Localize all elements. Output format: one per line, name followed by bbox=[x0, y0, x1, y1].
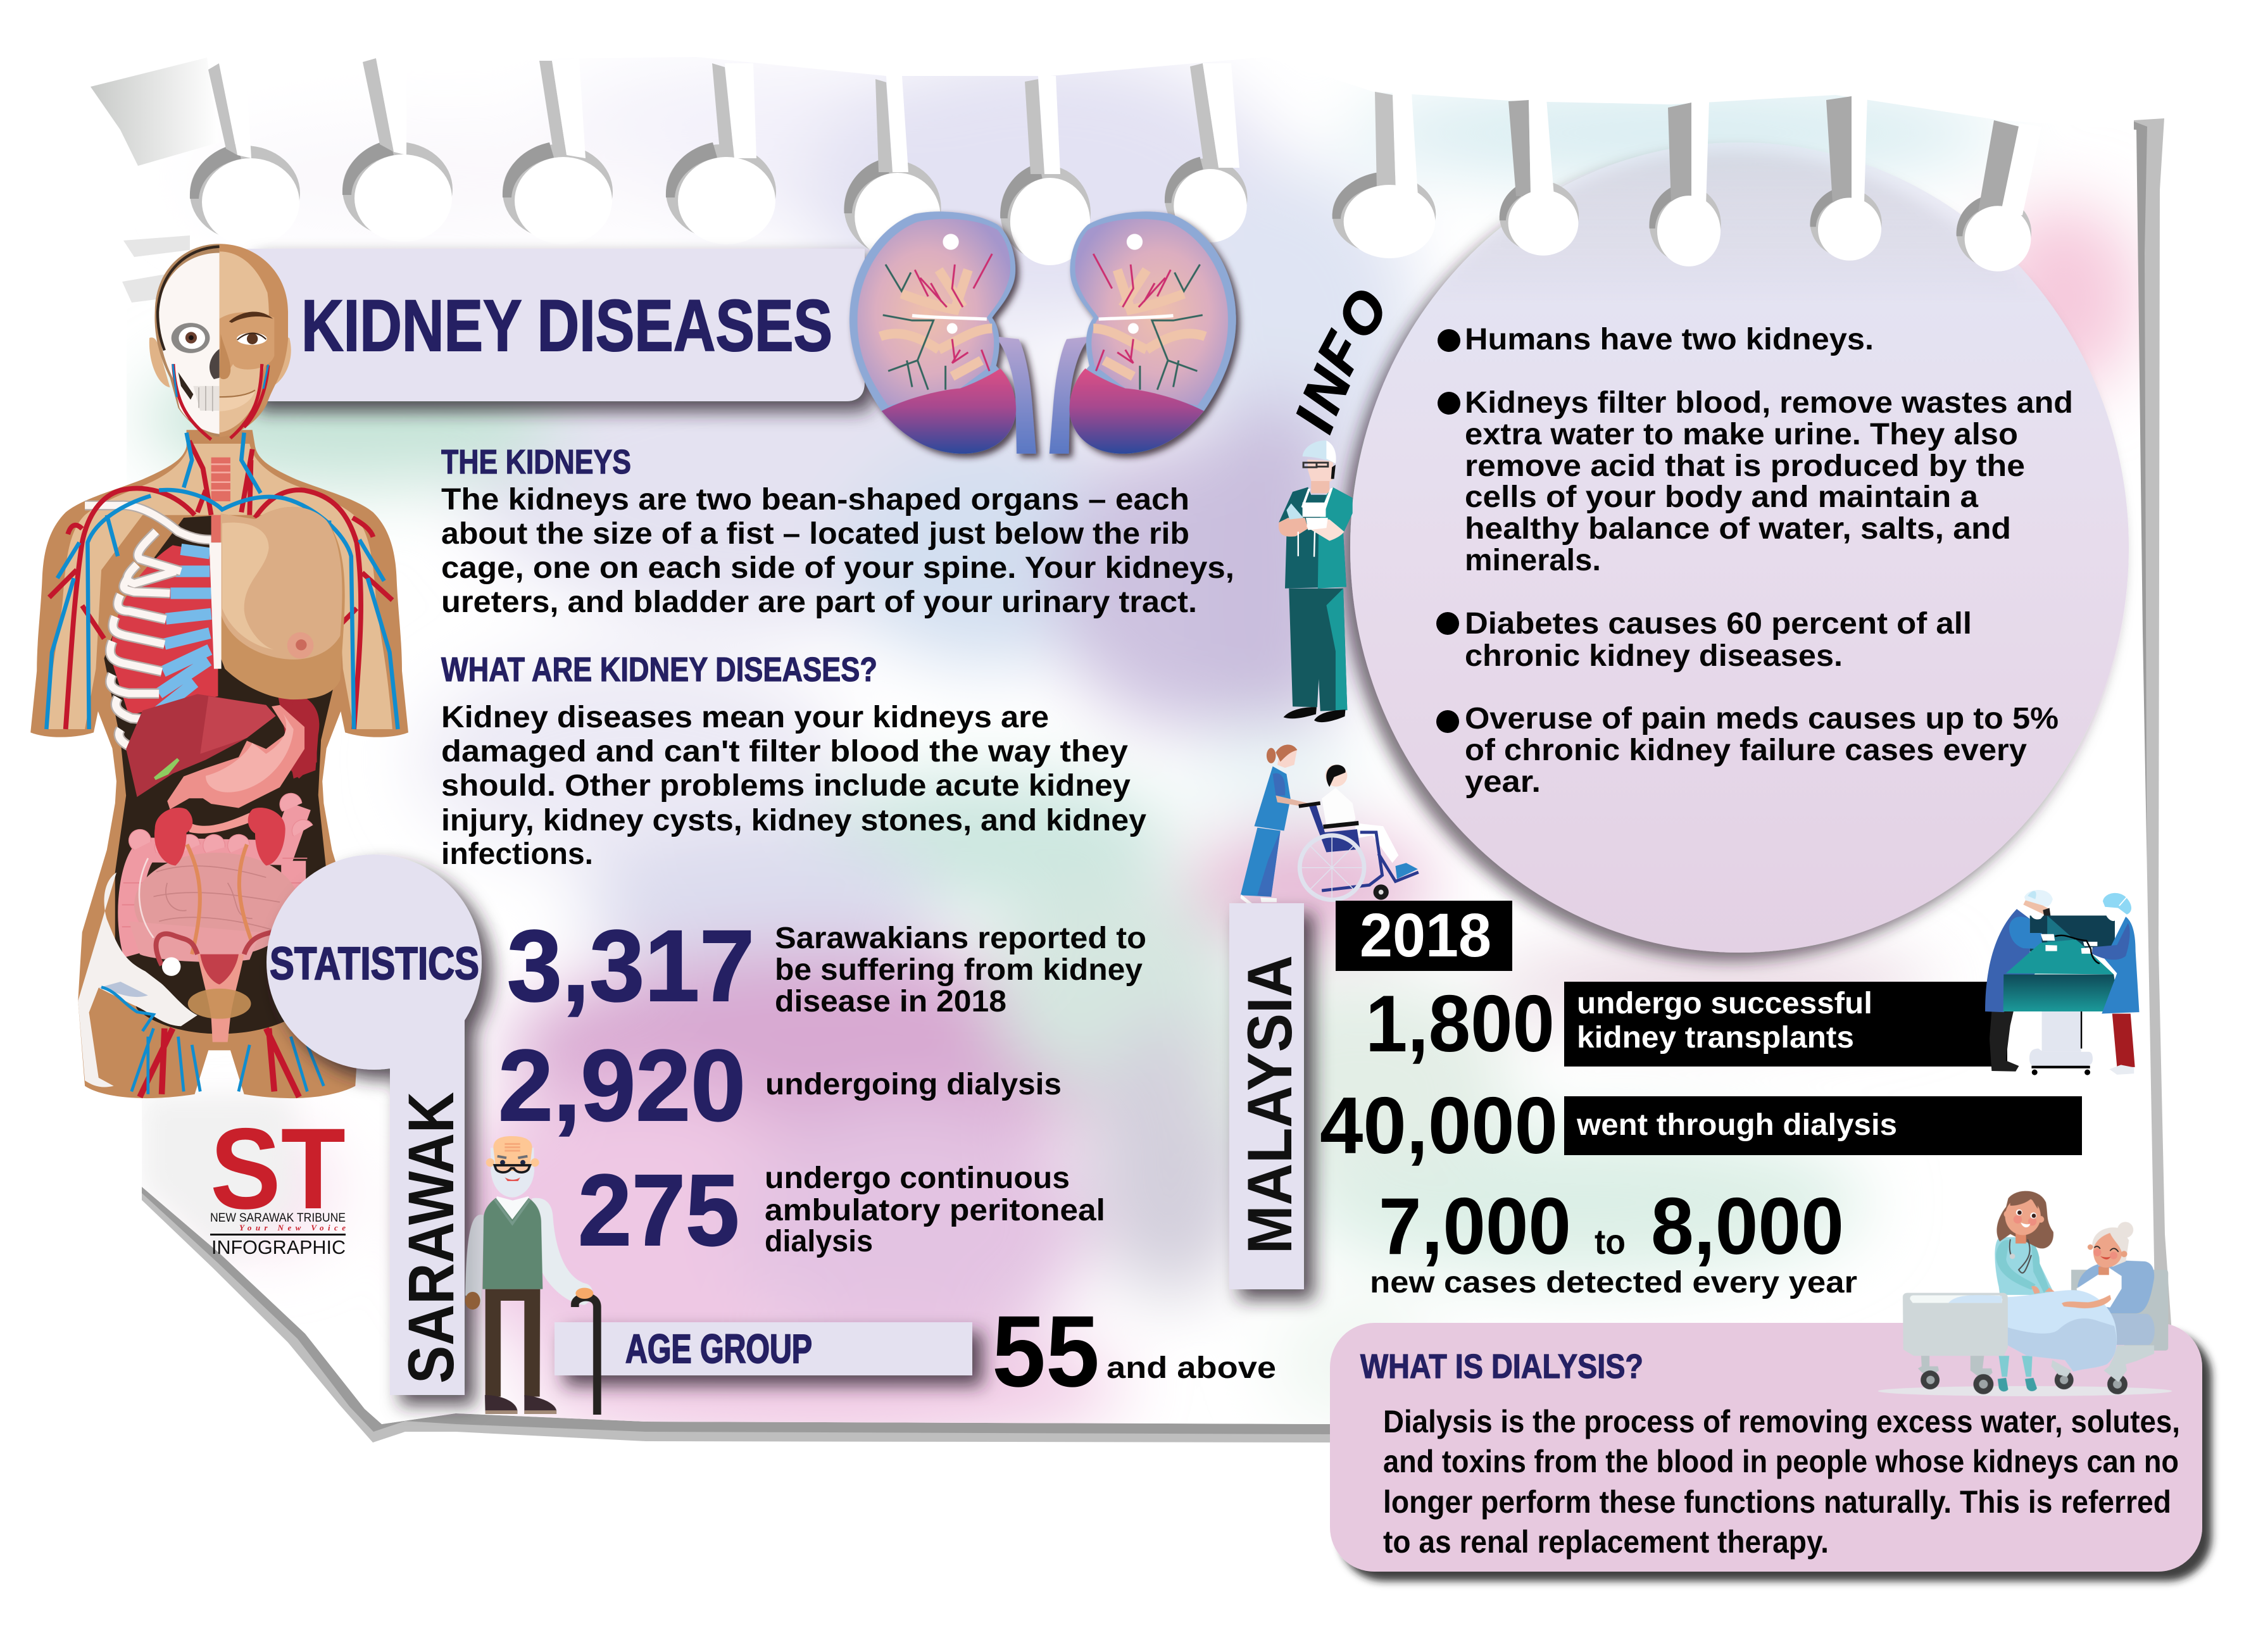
panel: watercolour paper background bbox=[120, 51, 2171, 1443]
bullet: what kidneys do: minerals. bbox=[1465, 544, 1601, 577]
stat: 1,800 transplants bbox=[1365, 979, 2007, 1068]
stat: 40,000 dialysis: 40,000 bbox=[1320, 1080, 1558, 1170]
spine and trachea bbox=[211, 458, 230, 542]
logo: New Sarawak Tribune infographic: Your New Voice bbox=[239, 1223, 346, 1232]
stat: 275 bbox=[578, 1153, 1105, 1267]
stat: 275: undergo continuous bbox=[765, 1161, 1070, 1195]
pelvis bones bbox=[78, 872, 197, 1087]
label: Sarawak: SARAWAK bbox=[395, 1092, 467, 1384]
stat: 1,800 transplants: undergo successful bbox=[1577, 987, 1872, 1020]
text block: the kidneys bbox=[441, 443, 1234, 619]
anatomy figure: human body bbox=[30, 244, 408, 1098]
Malaysia bar: MALAYSIA bbox=[1234, 955, 1305, 1254]
lungs bbox=[111, 545, 218, 715]
stat: age 55 and above bbox=[992, 1294, 1276, 1408]
torso cavity bbox=[104, 515, 343, 1034]
stat: 2,920: undergoing dialysis bbox=[765, 1068, 1062, 1101]
bullet: pain meds: Overuse of pain meds causes up to 5% bbox=[1465, 702, 2059, 735]
heading: curved INFO label: F bbox=[1304, 322, 1376, 383]
text block: the kidneys: ureters, and bladder are part of your urinary tract. bbox=[441, 585, 1197, 619]
stat: 1,800 transplants: 1,800 bbox=[1365, 979, 1555, 1068]
logo: New Sarawak Tribune infographic: ST bbox=[210, 1104, 346, 1233]
heading: statistics: STATISTICS bbox=[270, 939, 479, 989]
stat: 275: ambulatory peritoneal bbox=[765, 1194, 1105, 1227]
logo: New Sarawak Tribune infographic: INFOGRAPHIC bbox=[211, 1236, 346, 1258]
text block: info bullet list bbox=[1436, 323, 2073, 799]
heading: curved INFO label: N bbox=[1289, 358, 1363, 422]
stat: 3,317: disease in 2018 bbox=[775, 985, 1006, 1018]
sternum bbox=[210, 542, 222, 669]
icon: nurse and smiling patient in hospital bed bbox=[1878, 1191, 2172, 1396]
stat: 7,000 to 8,000 new cases: new cases detected every year bbox=[1370, 1266, 1857, 1299]
stat: age 55 and above: 55 bbox=[992, 1294, 1100, 1408]
bullet: what kidneys do: cells of your body and maintain a bbox=[1465, 480, 1978, 514]
icon: surgeons at operating table bbox=[1985, 890, 2140, 1075]
uterus region bbox=[156, 932, 272, 1042]
text block: what are kidney diseases: should. Other problems include acute kidney bbox=[441, 769, 1131, 803]
stat: 40,000 dialysis: went through dialysis bbox=[1576, 1108, 1897, 1142]
panel: info circle bbox=[1350, 142, 2129, 953]
text block: what are kidney diseases: damaged and can't filter blood the way they bbox=[441, 735, 1128, 768]
heading: curved INFO label: O bbox=[1324, 278, 1400, 349]
text block: the kidneys: about the size of a fist – located just below the rib bbox=[441, 517, 1189, 551]
stat: 3,317: be suffering from kidney bbox=[775, 953, 1143, 987]
panel: what is dialysis: Dialysis is the process of removing excess water, solutes, bbox=[1383, 1404, 2180, 1439]
title banner bbox=[247, 249, 865, 401]
organ: kidneys bbox=[154, 808, 192, 866]
bullet: two kidneys: Humans have two kidneys. bbox=[1465, 323, 1874, 356]
stat: 40,000 dialysis bbox=[1320, 1080, 2082, 1170]
stat: 2,920 bbox=[498, 1029, 1062, 1142]
ribs bbox=[85, 505, 211, 750]
text block: the kidneys: THE KIDNEYS bbox=[441, 443, 631, 481]
logo: New Sarawak Tribune infographic: NEW SARAWAK TRIBUNE bbox=[210, 1211, 346, 1225]
stat: 1,800 transplants: kidney transplants bbox=[1577, 1021, 1854, 1054]
stat: age 55 and above: and above bbox=[1106, 1351, 1276, 1385]
heading: KIDNEY DISEASES: KIDNEY DISEASES bbox=[301, 285, 832, 366]
stomach and spleen bbox=[282, 699, 317, 779]
head: half skull, half face bbox=[149, 244, 291, 439]
bullet: what kidneys do bbox=[1438, 386, 2073, 577]
curled white paper corner bbox=[145, 1098, 286, 1244]
bullet: diabetes bbox=[1436, 607, 1972, 673]
stat: 275: 275 bbox=[578, 1153, 739, 1267]
icon: surgeon in green scrubs bbox=[1279, 441, 1353, 722]
text block: the kidneys: The kidneys are two bean-shaped organs – each bbox=[441, 483, 1189, 516]
stat: 3,317: 3,317 bbox=[507, 909, 755, 1022]
heading: curved INFO label: I bbox=[1282, 401, 1346, 440]
text block: the kidneys: cage, one on each side of your spine. Your kidneys, bbox=[441, 551, 1234, 585]
stat: 3,317 bbox=[507, 909, 1146, 1022]
liver bbox=[126, 694, 276, 797]
year label: 2018: 2018 bbox=[1360, 901, 1491, 970]
stat: 7,000 to 8,000 new cases: 7,000 bbox=[1379, 1181, 1571, 1271]
intestines bbox=[122, 793, 313, 962]
body silhouette bbox=[30, 430, 408, 1098]
torn corner curl bbox=[91, 58, 219, 166]
age group bar bbox=[555, 1322, 972, 1375]
stat: 7,000 to 8,000 new cases: to bbox=[1595, 1222, 1626, 1261]
paper sheet grey edge bbox=[142, 118, 2172, 1442]
stat: 3,317: Sarawakians reported to bbox=[775, 922, 1146, 955]
bullet: pain meds: year. bbox=[1465, 765, 1541, 799]
arm and leg blood vessels bbox=[46, 433, 398, 1097]
bullet: what kidneys do: healthy balance of water, salts, and bbox=[1465, 512, 2011, 546]
panel: what is dialysis: longer perform these functions naturally. This is referred bbox=[1383, 1484, 2171, 1520]
text block: what are kidney diseases: WHAT ARE KIDNEY DISEASES? bbox=[441, 651, 877, 689]
age group bar: AGE GROUP bbox=[625, 1326, 812, 1372]
paper punch holes and torn slits bbox=[91, 54, 2041, 303]
text block: what are kidney diseases: Kidney diseases mean your kidneys are bbox=[441, 701, 1049, 734]
panel: what is dialysis: WHAT IS DIALYSIS? bbox=[1360, 1348, 1643, 1386]
bullet: what kidneys do: remove acid that is produced by the bbox=[1465, 449, 2025, 483]
text block: what are kidney diseases: injury, kidney cysts, kidney stones, and kidney bbox=[441, 804, 1146, 837]
icon: pair of kidneys bbox=[849, 211, 1236, 454]
icon: nurse pushing patient in wheelchair bbox=[1241, 745, 1419, 905]
stat: 2,920: 2,920 bbox=[498, 1029, 746, 1142]
bullet: pain meds: of chronic kidney failure cases every bbox=[1465, 734, 2027, 767]
stat: 7,000 to 8,000 new cases bbox=[1370, 1181, 1857, 1299]
panel: what is dialysis: and toxins from the blood in people whose kidneys can no bbox=[1383, 1444, 2179, 1479]
text block: what are kidney diseases bbox=[441, 651, 1146, 871]
stat: 7,000 to 8,000 new cases: 8,000 bbox=[1651, 1181, 1844, 1271]
bullet: diabetes: chronic kidney diseases. bbox=[1465, 639, 1843, 673]
stat: 275: dialysis bbox=[765, 1225, 873, 1258]
panel: what is dialysis: to as renal replacement therapy. bbox=[1383, 1524, 1829, 1560]
panel: what is dialysis bbox=[1330, 1323, 2202, 1572]
bullet: diabetes: Diabetes causes 60 percent of all bbox=[1465, 607, 1972, 641]
statistics circle and Sarawak bar bbox=[266, 854, 482, 1395]
icon: old man with cane bbox=[465, 1136, 597, 1415]
text block: what are kidney diseases: infections. bbox=[441, 837, 593, 871]
bullet: what kidneys do: extra water to make urine. They also bbox=[1465, 418, 2018, 451]
bullet: what kidneys do: Kidneys filter blood, remove wastes and bbox=[1465, 386, 2073, 420]
right chest skin flap bbox=[221, 507, 345, 699]
bullet: pain meds bbox=[1436, 702, 2059, 799]
